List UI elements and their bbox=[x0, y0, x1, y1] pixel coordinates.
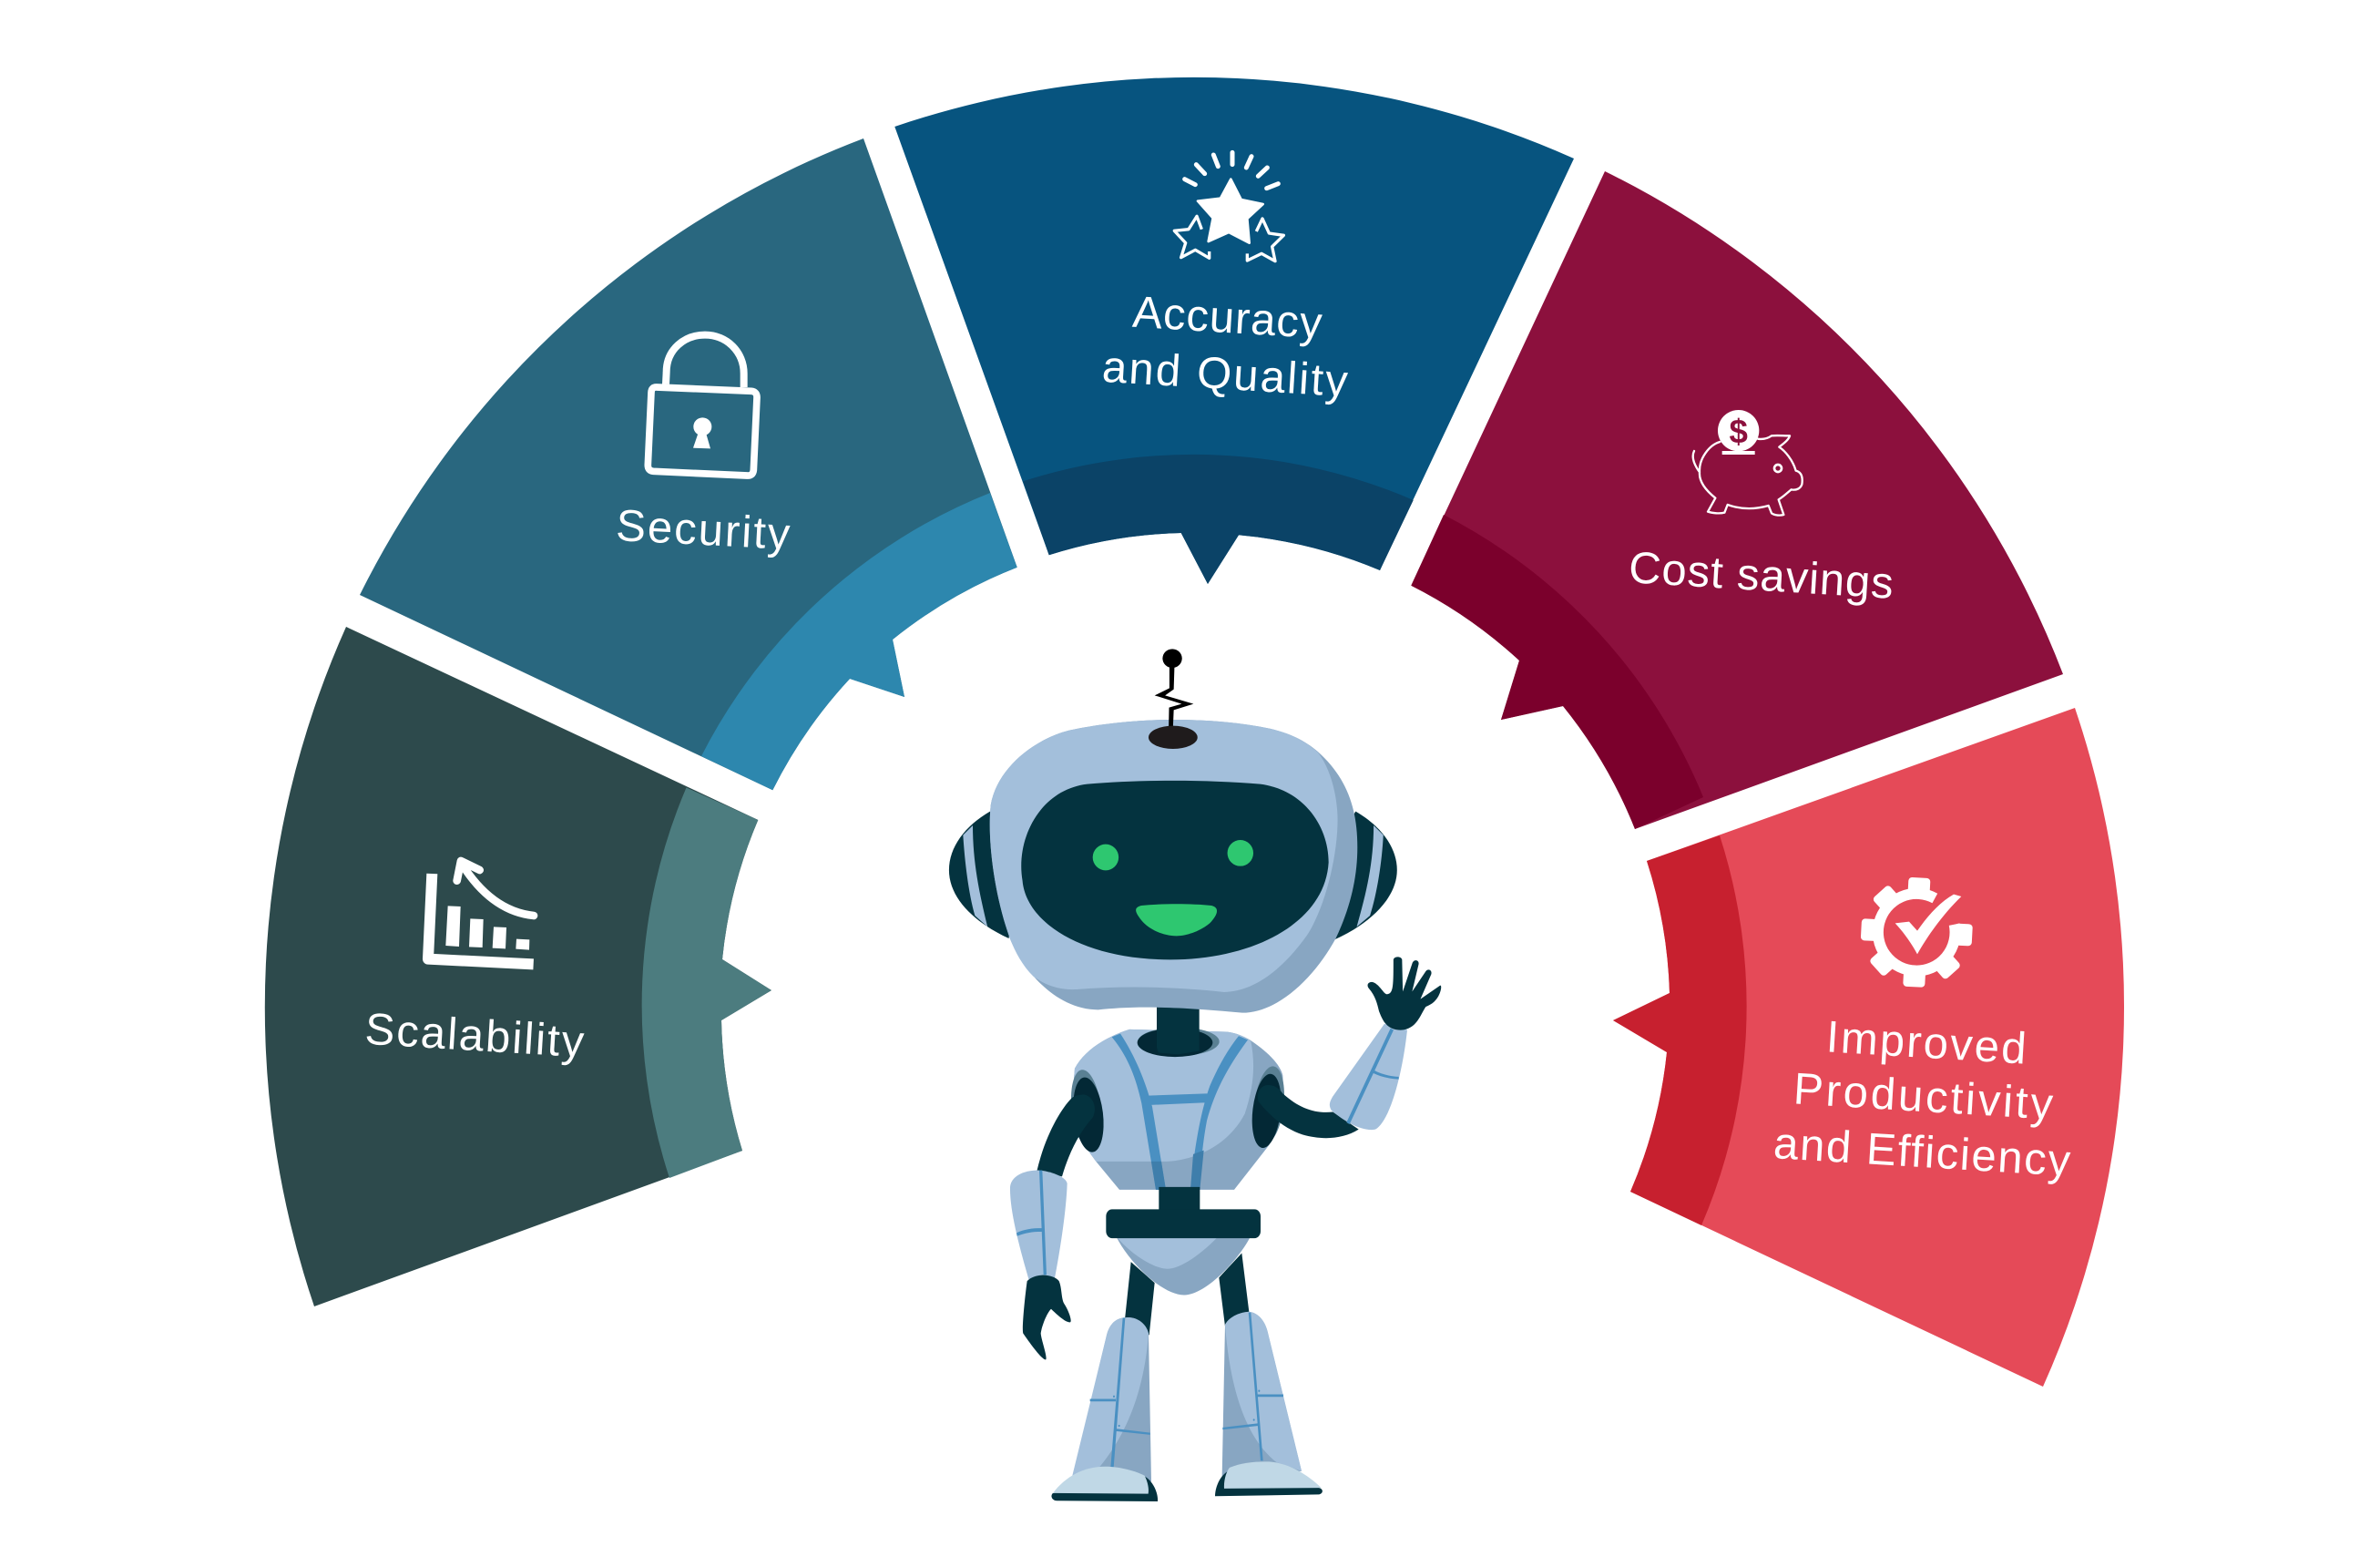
icon: piggy bank: $ bbox=[1729, 413, 1748, 450]
accuracy inner band bbox=[1023, 455, 1414, 584]
robot head bbox=[949, 649, 1441, 1030]
label: accuracy and quality bbox=[1101, 288, 1351, 406]
panel: cost savings bbox=[1411, 171, 2063, 829]
label: improved productivity and efficiency bbox=[1772, 1012, 2073, 1186]
icon: gear with check bbox=[1858, 875, 1975, 989]
panel: accuracy and quality bbox=[894, 77, 1574, 584]
icon: piggy bank bbox=[1693, 410, 1803, 516]
icon: bar chart with arrow bbox=[428, 861, 534, 964]
label: improved productivity and efficiency: Productivity bbox=[1793, 1064, 2057, 1130]
panel: security bbox=[360, 138, 1017, 790]
panel: improved productivity and efficiency bbox=[1613, 708, 2124, 1387]
icon: stars bbox=[1174, 152, 1283, 261]
label: cost savings: Cost savings bbox=[1628, 543, 1895, 609]
label: accuracy and quality: and Quality bbox=[1101, 343, 1351, 406]
security inner band bbox=[701, 493, 1017, 790]
label: scalability: Scalability bbox=[363, 1005, 587, 1067]
robot body bbox=[1010, 1002, 1407, 1501]
cost savings inner band bbox=[1411, 515, 1703, 829]
scalability inner band bbox=[642, 787, 771, 1178]
label: improved productivity and efficiency: and Efficiency bbox=[1772, 1119, 2073, 1186]
panel: scalability bbox=[265, 627, 771, 1306]
label: accuracy and quality: Accuracy bbox=[1131, 288, 1324, 348]
icon: padlock bbox=[648, 335, 757, 476]
productivity inner band bbox=[1613, 835, 1747, 1225]
robot bbox=[949, 649, 1441, 1501]
label: security: Security bbox=[615, 501, 793, 559]
label: improved productivity and efficiency: Improved bbox=[1825, 1012, 2029, 1074]
